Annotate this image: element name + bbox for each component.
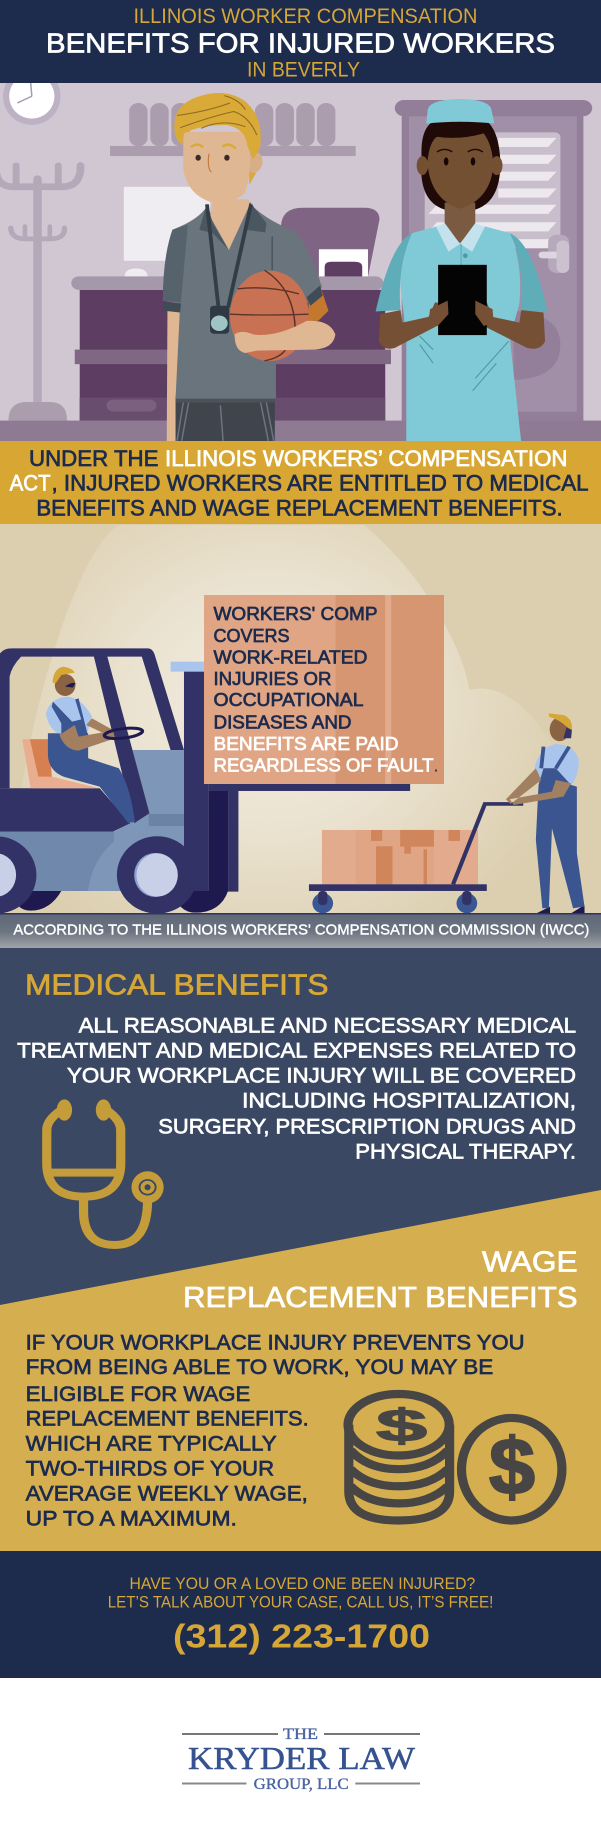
illustration: warehouse forklift scene (0, 524, 601, 915)
title line 3: IN BEVERLY (247, 58, 360, 81)
dollar sign on stack: $ (376, 1400, 427, 1451)
wage body line 6: TWO-THIRDS OF YOUR (26, 1457, 274, 1480)
icon: stethoscope (47, 1099, 164, 1245)
source caption: ACCORDING TO THE ILLINOIS WORKERS' COMPENSATION COMMISSION (IWCC) (13, 921, 589, 938)
box line 8: REGARDLESS OF FAULT (214, 755, 434, 776)
forklift driver (22, 667, 143, 823)
wage body line 4: REPLACEMENT BENEFITS. (26, 1408, 309, 1430)
wage body line 2: FROM BEING ABLE TO WORK, YOU MAY BE (26, 1356, 493, 1379)
text box: workers comp (204, 595, 444, 784)
main title: BENEFITS FOR INJURED WORKERS (46, 27, 555, 58)
box on forks bar (209, 783, 410, 791)
medical body line 3: YOUR WORKPLACE INJURY WILL BE COVERED (67, 1065, 576, 1088)
banner line 2 white: ACT (10, 470, 51, 496)
box line 2: COVERS (214, 625, 290, 646)
illustration: office scene with coach and nurse (0, 68, 601, 444)
light background shape (8, 525, 598, 915)
office chair (281, 208, 379, 277)
medical body line 2: TREATMENT AND MEDICAL EXPENSES RELATED TO (17, 1040, 576, 1063)
heading: replacement benefits: REPLACEMENT BENEFITS (183, 1282, 578, 1314)
banner line 1 navy: UNDER THE (29, 446, 158, 471)
panel: medical benefits (0, 948, 601, 1310)
wage body line 8: UP TO A MAXIMUM. (26, 1508, 237, 1531)
heading: medical benefits: MEDICAL BENEFITS (25, 969, 328, 1001)
character: nurse with tablet (376, 99, 547, 443)
forklift (0, 648, 238, 914)
yellow intro banner (0, 441, 601, 524)
medical body line 6: PHYSICAL THERAPY. (355, 1140, 576, 1163)
banner line 3: BENEFITS AND WAGE REPLACEMENT BENEFITS. (36, 496, 563, 520)
box final dot: . (434, 755, 439, 776)
cart worker (506, 713, 585, 913)
title line 1: ILLINOIS WORKER COMPENSATION (134, 5, 478, 28)
cta line 2: LET’S TALK ABOUT YOUR CASE, CALL US, IT’S FREE! (108, 1593, 493, 1612)
dollar sign on coin: $ (489, 1422, 535, 1511)
box line 5: OCCUPATIONAL (214, 689, 364, 710)
box line 3: WORK-RELATED (214, 646, 368, 667)
coat rack (0, 166, 81, 405)
header band (0, 0, 601, 83)
ground line (0, 913, 601, 915)
box line 4: INJURIES OR (214, 668, 332, 689)
heading: wage: WAGE (482, 1247, 578, 1279)
logo: the: THE (283, 1726, 318, 1743)
logo: kryder law: KRYDER LAW (188, 1740, 416, 1776)
banner line 1 white: ILLINOIS WORKERS’ COMPENSATION (165, 446, 568, 471)
logo: group llc: GROUP, LLC (254, 1776, 349, 1793)
wage body line 5: WHICH ARE TYPICALLY (26, 1432, 277, 1455)
wage body line 7: AVERAGE WEEKLY WAGE, (26, 1483, 308, 1506)
wall shelf with binders (110, 103, 356, 156)
source caption band (0, 914, 601, 948)
box line 7: BENEFITS ARE PAID (214, 733, 398, 754)
medical body line 5: SURGERY, PRESCRIPTION DRUGS AND (158, 1115, 576, 1138)
reception desk (71, 276, 391, 421)
panel: call to action (0, 1551, 601, 1678)
icon: wall clock (3, 68, 61, 125)
mouse (125, 269, 148, 277)
phone number: (312) 223-1700 (173, 1618, 430, 1655)
door (395, 100, 592, 421)
banner line 2 navy: , INJURED WORKERS ARE ENTITLED TO MEDICAL (52, 470, 588, 496)
pallet cart with boxes (309, 804, 523, 913)
cta line 1: HAVE YOU OR A LOVED ONE BEEN INJURED? (130, 1574, 475, 1593)
floor (0, 421, 601, 444)
computer monitor (124, 187, 210, 261)
logo: the kryder law group (182, 1726, 420, 1793)
wage body line 1: IF YOUR WORKPLACE INJURY PREVENTS YOU (26, 1332, 524, 1355)
wage body line 3: ELIGIBLE FOR WAGE (26, 1383, 250, 1406)
icon: coin stack and dollar coin (348, 1394, 562, 1520)
box line 6: DISEASES AND (214, 711, 352, 732)
box line 1: WORKERS' COMP (214, 603, 378, 624)
medical body line 1: ALL REASONABLE AND NECESSARY MEDICAL (79, 1015, 576, 1038)
character: coach with basketball (163, 93, 335, 443)
medical body line 4: INCLUDING HOSPITALIZATION, (242, 1090, 576, 1113)
panel: wage replacement benefits (0, 1190, 601, 1551)
